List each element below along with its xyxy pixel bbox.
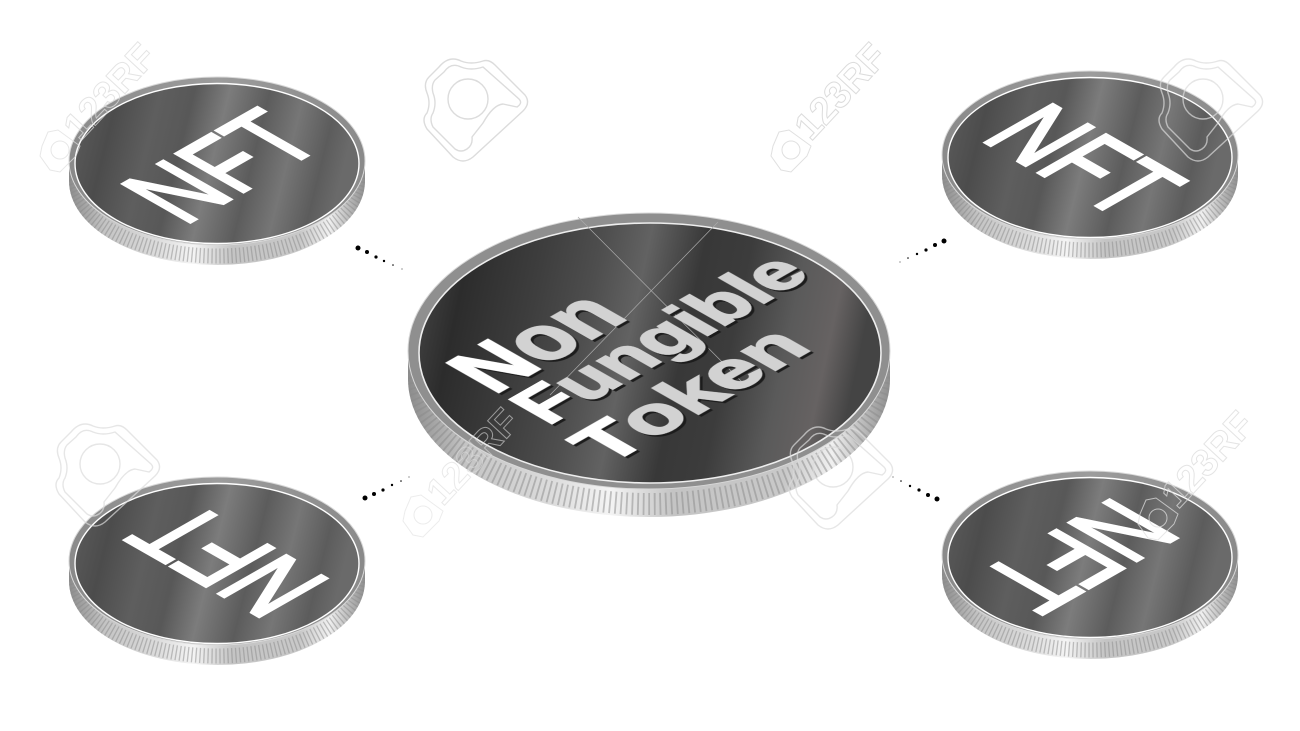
watermark: 123RF top left: 123RF bbox=[56, 36, 164, 148]
label: NFT bottom left: NFT bbox=[103, 488, 355, 632]
watermark: 123RF centre: 123RF bbox=[419, 401, 527, 513]
coin: bottom left NFT bbox=[69, 477, 365, 665]
connector: dots bottom right bbox=[892, 476, 940, 502]
icon: watermark stamp top bbox=[424, 59, 528, 161]
heading: Non: Non bbox=[427, 279, 646, 404]
label: NFT bottom right: NFT bbox=[952, 484, 1203, 627]
heading: Token: Token bbox=[553, 317, 827, 473]
heading: Fungible: Fungible bbox=[494, 244, 826, 434]
coin: top right NFT bbox=[942, 71, 1238, 259]
coin: central Non Fungible Token bbox=[408, 213, 890, 517]
icon: watermark stamp centre bbox=[789, 427, 893, 529]
connector: dots top left bbox=[356, 246, 402, 270]
connector: dots bottom left bbox=[362, 476, 410, 500]
watermark: 123RF top centre: 123RF bbox=[787, 36, 895, 148]
coin: bottom right NFT bbox=[942, 471, 1238, 659]
label: NFT top left: NFT bbox=[97, 95, 348, 238]
label: NFT top right: NFT bbox=[957, 89, 1209, 233]
icon: watermark stamp left bbox=[56, 424, 160, 526]
watermark: 123RF right: 123RF bbox=[1154, 404, 1262, 516]
coin: top left NFT bbox=[69, 77, 365, 265]
icon: watermark stamp top right bbox=[1159, 59, 1263, 161]
connector: dots top right bbox=[900, 238, 946, 262]
